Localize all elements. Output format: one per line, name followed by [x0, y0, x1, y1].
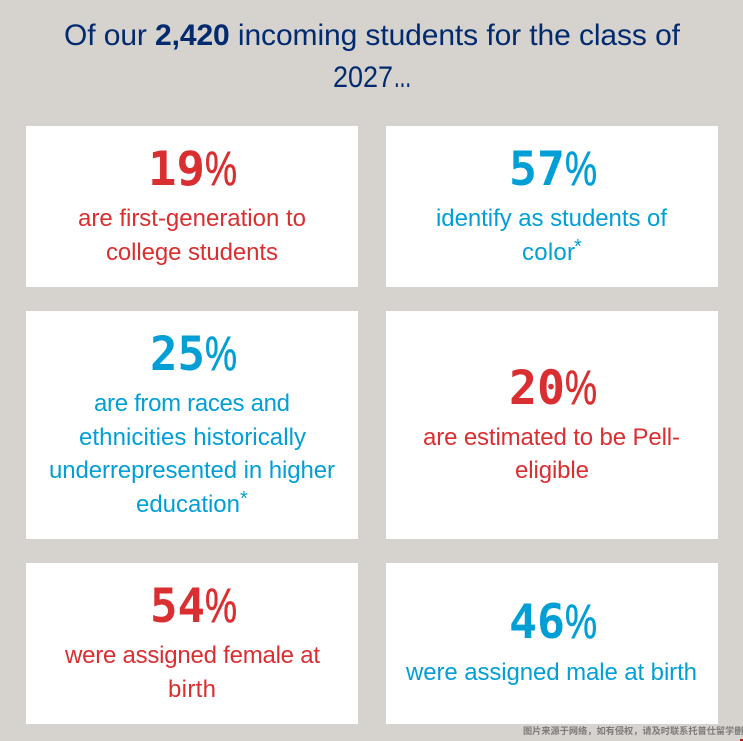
panel: assigned female at birth	[26, 563, 358, 724]
panel: underrepresented races and ethnicities: %	[205, 328, 237, 381]
panel: students of color: color	[522, 239, 575, 266]
panel: Pell-eligible: 20	[509, 361, 565, 416]
panel: assigned female at birth: were assigned female at	[64, 642, 320, 669]
panel: first-generation	[26, 126, 358, 287]
panel: underrepresented races and ethnicities	[26, 311, 358, 539]
panel: Pell-eligible: %	[565, 362, 597, 415]
panel: underrepresented races and ethnicities: education	[136, 491, 240, 518]
panel: assigned male at birth	[386, 563, 718, 724]
panel: students of color: %	[565, 143, 597, 196]
title	[64, 19, 681, 95]
panel: assigned female at birth: %	[205, 580, 237, 633]
panel: first-generation: are first-generation to	[78, 205, 306, 232]
panel: underrepresented races and ethnicities: underrepresented in higher	[49, 457, 335, 484]
panel: students of color: 57	[509, 142, 565, 197]
panel: assigned female at birth: birth	[168, 676, 216, 703]
panel: Pell-eligible: are estimated to be Pell-	[423, 424, 680, 451]
panel: Pell-eligible	[386, 311, 718, 539]
panel: students of color: identify as students of	[436, 205, 667, 232]
panel: assigned male at birth: were assigned male at birth	[405, 659, 697, 686]
panel: underrepresented races and ethnicities: 25	[150, 327, 205, 382]
panel: underrepresented races and ethnicities: ethnicities historically	[79, 424, 306, 451]
title: ...	[394, 57, 411, 95]
panel: students of color	[386, 126, 718, 287]
panel: assigned male at birth: 46	[509, 595, 565, 650]
panel: underrepresented races and ethnicities: are from races and	[94, 390, 290, 417]
panel: students of color: *	[574, 236, 582, 258]
panel: first-generation: college students	[106, 239, 278, 266]
title: 2027	[333, 61, 393, 94]
title: Of our 2,420 incoming students for the class of	[64, 19, 681, 52]
panel: underrepresented races and ethnicities: *	[240, 488, 248, 510]
panel: Pell-eligible: eligible	[515, 457, 589, 484]
panel: assigned male at birth: %	[565, 596, 597, 649]
panel: first-generation: %	[205, 143, 237, 196]
panel: assigned female at birth: 54	[150, 579, 205, 634]
panel: first-generation: 19	[148, 142, 205, 197]
